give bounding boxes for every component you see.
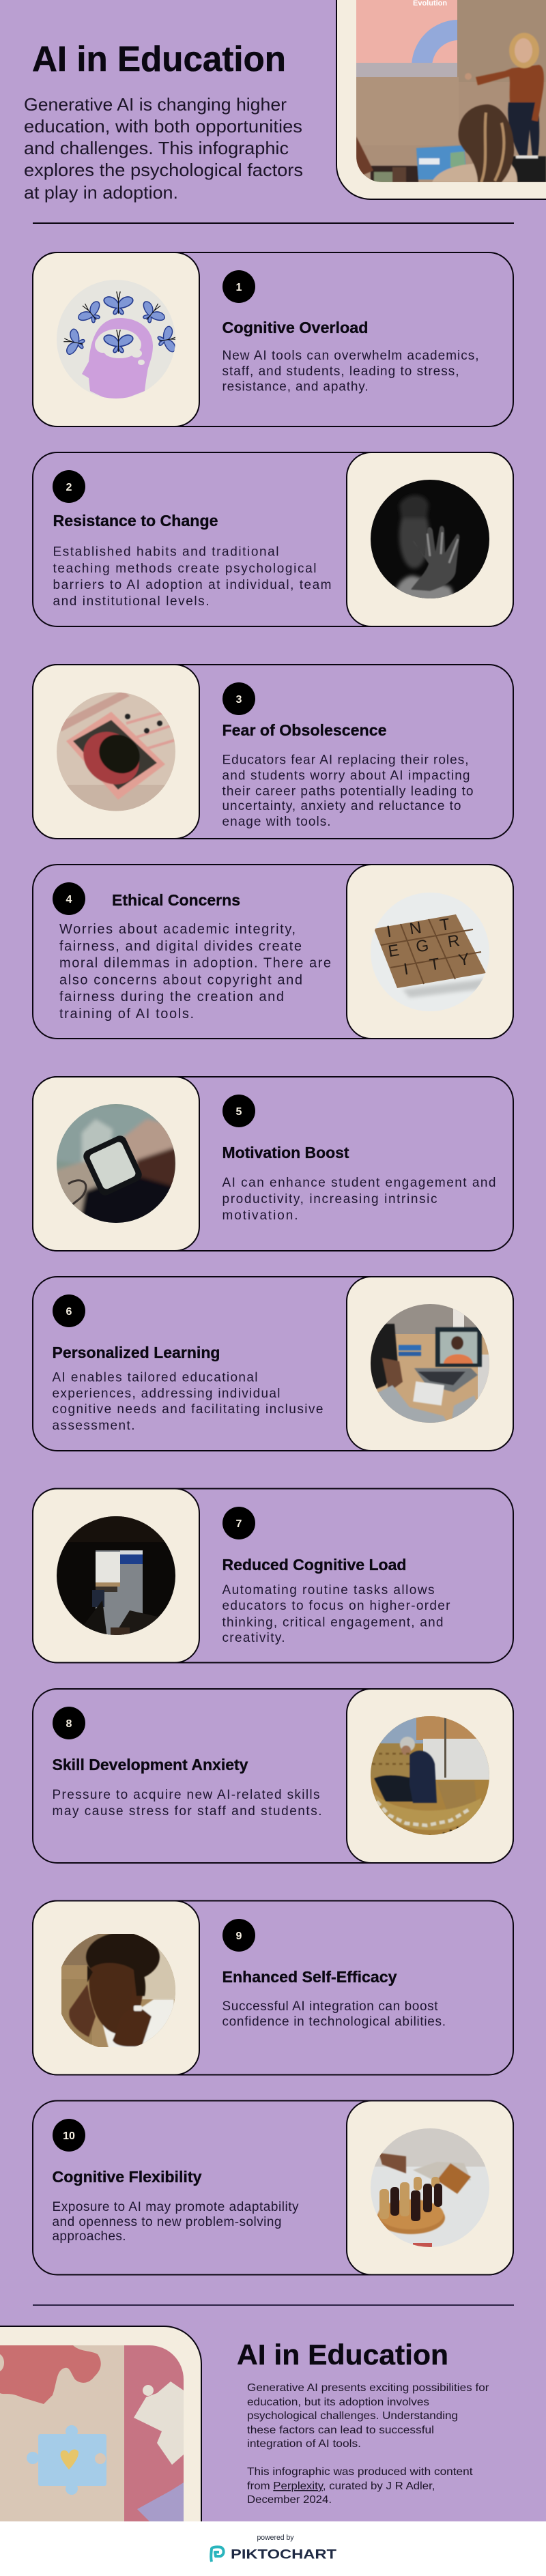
heading: resistance to change: Resistance to Change <box>53 512 218 530</box>
body text <box>52 1788 321 1819</box>
closing text block: from Perplexity , curated by J R Adler, <box>247 2480 435 2492</box>
photo: scrabble tiles spelling integrity <box>369 891 491 1013</box>
body text <box>52 1370 324 1433</box>
panel: card 6 personalized learning <box>33 1277 513 1451</box>
body text: Pressure to acquire new AI-related skills <box>52 1788 320 1802</box>
photo: illuminated manuscript letter <box>55 689 177 815</box>
body text: fairness during the creation and <box>59 989 284 1004</box>
title: AI in Education <box>32 40 286 79</box>
body text: assessment. <box>52 1419 135 1433</box>
intro text block: and challenges. This infographic <box>24 138 289 158</box>
number badge 3: 3 <box>236 694 242 706</box>
body text: enage with tools. <box>222 815 330 829</box>
body text: teaching methods create psychological <box>53 562 317 576</box>
body text: creativity. <box>222 1631 285 1645</box>
number badge 10 <box>53 2119 85 2152</box>
body text: moral dilemmas in adoption. There are <box>59 955 331 970</box>
number badge 8: 8 <box>66 1718 72 1730</box>
body text: experiences, addressing individual <box>52 1387 280 1401</box>
closing heading: AI in Education <box>237 2339 448 2371</box>
number badge 6: 6 <box>66 1306 72 1318</box>
body text <box>222 1583 450 1645</box>
photo: scrabble tiles spelling integrity: N <box>408 918 423 938</box>
body text: Educators fear AI replacing their roles, <box>222 753 468 767</box>
photo: wooden bead puzzle game <box>369 2126 491 2252</box>
photo: dark warehouse doorway <box>55 1515 177 1638</box>
body text: cognitive needs and facilitating inclusive <box>52 1402 324 1417</box>
body text: AI enables tailored educational <box>52 1370 258 1385</box>
body text: Exposure to AI may promote adaptability <box>52 2200 299 2214</box>
panel: card 1 cognitive overload <box>33 252 513 426</box>
body text: confidence in technological abilities. <box>222 2014 446 2029</box>
body text: and students worry about AI impacting <box>222 768 470 783</box>
closing text block: integration of AI tools. <box>247 2438 361 2450</box>
photo: scrabble tiles spelling integrity: E <box>387 941 401 961</box>
photo: student on a video call <box>371 1304 489 1423</box>
body text: training of AI tools. <box>59 1007 194 1022</box>
photo: worker building a brick kiln <box>371 1716 489 1835</box>
body text: Automating routine tasks allows <box>222 1583 434 1597</box>
piktochart logo <box>211 2547 336 2562</box>
body text <box>222 1999 446 2029</box>
body text <box>52 2200 299 2244</box>
panel: card 4 ethical concerns <box>33 865 513 1039</box>
panel: card 5 motivation boost <box>33 1077 513 1251</box>
heading: fear of obsolescence: Fear of Obsolescence <box>222 721 386 739</box>
number badge 9: 9 <box>236 1930 242 1942</box>
closing text block: This infographic was produced with content <box>247 2466 473 2478</box>
photo: scrabble tiles spelling integrity: Y <box>457 950 471 970</box>
body text: their career paths potentially leading to <box>222 785 474 798</box>
intro text block: at play in adoption. <box>24 182 178 203</box>
body text: Successful AI integration can boost <box>222 1999 438 2014</box>
body text: and institutional levels. <box>53 594 209 609</box>
panel: card 2 resistance to change <box>33 452 513 626</box>
number badge 6 <box>53 1294 85 1327</box>
number badge 5: 5 <box>236 1106 242 1118</box>
number badge 5 <box>222 1095 255 1127</box>
body text: Worries about academic integrity, <box>59 922 296 937</box>
number badge 4: 4 <box>66 894 72 906</box>
body text: thinking, critical engagement, and <box>222 1616 444 1630</box>
piktochart logo: PIKTOCHART <box>231 2548 336 2562</box>
photo: scrabble tiles spelling integrity: T <box>428 955 442 974</box>
body text: barriers to AI adoption at individual, team <box>53 578 332 592</box>
heading: reduced cognitive load: Reduced Cognitive Load <box>222 1556 407 1574</box>
panel: card 3 fear of obsolescence <box>33 665 513 839</box>
closing text block: psychological challenges. Understanding <box>247 2410 458 2422</box>
body text: AI can enhance student engagement and <box>222 1176 495 1190</box>
closing text block: these factors can lead to successful <box>247 2425 434 2436</box>
body text: New AI tools can overwhelm academics, <box>222 349 479 363</box>
photo: scrabble tiles spelling integrity: I <box>402 960 410 979</box>
body text: and openness to new problem-solving <box>52 2215 281 2229</box>
hero photo card: presenter in classroom <box>336 0 546 199</box>
number badge 7: 7 <box>236 1518 242 1530</box>
divider <box>33 222 514 224</box>
powered by label: powered by <box>257 2534 294 2542</box>
heading: cognitive overload: Cognitive Overload <box>222 319 369 336</box>
body text <box>222 753 474 829</box>
number badge 1 <box>222 270 255 303</box>
body text <box>222 349 479 394</box>
body text: uncertainty, anxiety and reluctance to <box>222 799 461 813</box>
number badge 10: 10 <box>63 2130 75 2142</box>
body text: fairness, and digital divides create <box>59 939 302 954</box>
closing text block: December 2024. <box>247 2494 332 2506</box>
number badge 7 <box>222 1507 255 1539</box>
body text: approaches. <box>52 2229 126 2244</box>
number badge 2 <box>53 470 85 503</box>
photo: hand raised in refusal <box>369 478 491 604</box>
body text <box>222 1176 495 1223</box>
closing text block: education, but its adoption involves <box>247 2397 429 2408</box>
heading: ethical concerns: Ethical Concerns <box>112 891 240 909</box>
body text: motivation. <box>222 1209 298 1223</box>
photo: scrabble tiles spelling integrity: G <box>414 936 430 956</box>
photo: thoughtful young man <box>58 1931 177 2051</box>
footer photo card: puzzle pieces <box>0 2326 201 2523</box>
intro text block: Generative AI is changing higher <box>24 94 287 115</box>
panel: card 9 enhanced self-efficacy <box>33 1901 513 2074</box>
photo: smartwatch on tattooed wrist <box>55 1102 177 1228</box>
heading: skill development anxiety: Skill Development Anxiety <box>52 1756 248 1774</box>
body text: resistance, and apathy. <box>222 379 369 394</box>
heading: cognitive flexibility: Cognitive Flexibility <box>52 2168 202 2186</box>
photo: scrabble tiles spelling integrity: R <box>446 931 461 951</box>
intro text block <box>24 94 303 203</box>
number badge 9 <box>222 1919 255 1952</box>
number badge 2: 2 <box>66 482 72 493</box>
body text: may cause stress for staff and students. <box>52 1804 321 1819</box>
number badge 1: 1 <box>236 282 242 293</box>
panel: card 7 reduced cognitive load <box>33 1489 513 1662</box>
heading: enhanced self-efficacy: Enhanced Self-Efficacy <box>222 1968 397 1986</box>
body text <box>59 922 331 1022</box>
body text <box>53 545 332 609</box>
photo: scrabble tiles spelling integrity: T <box>438 915 452 935</box>
body text: Established habits and traditional <box>53 545 278 560</box>
body text: also concerns about copyright and <box>59 973 302 988</box>
heading: personalized learning: Personalized Learning <box>52 1344 220 1361</box>
footer white strip <box>0 2521 546 2576</box>
heading: motivation boost: Motivation Boost <box>222 1144 349 1161</box>
photo: scrabble tiles spelling integrity: I <box>385 923 392 941</box>
closing text block: Generative AI presents exciting possibilities for <box>247 2382 489 2394</box>
number badge 8 <box>53 1707 85 1739</box>
photo: butterflies around a head <box>57 280 175 399</box>
divider <box>33 2304 514 2306</box>
number badge 4 <box>53 882 85 915</box>
intro text block: education, with both opportunities <box>24 116 302 136</box>
intro text block: explores the psychological factors <box>24 160 303 180</box>
body text: educators to focus on higher-order <box>222 1599 450 1613</box>
body text: staff, and students, leading to stress, <box>222 364 459 379</box>
closing text block <box>247 2382 489 2506</box>
number badge 3 <box>222 682 255 715</box>
panel: card 8 skill development anxiety <box>33 1689 513 1863</box>
panel: card 10 cognitive flexibility <box>33 2100 513 2275</box>
body text: productivity, increasing intrinsic <box>222 1192 437 1206</box>
